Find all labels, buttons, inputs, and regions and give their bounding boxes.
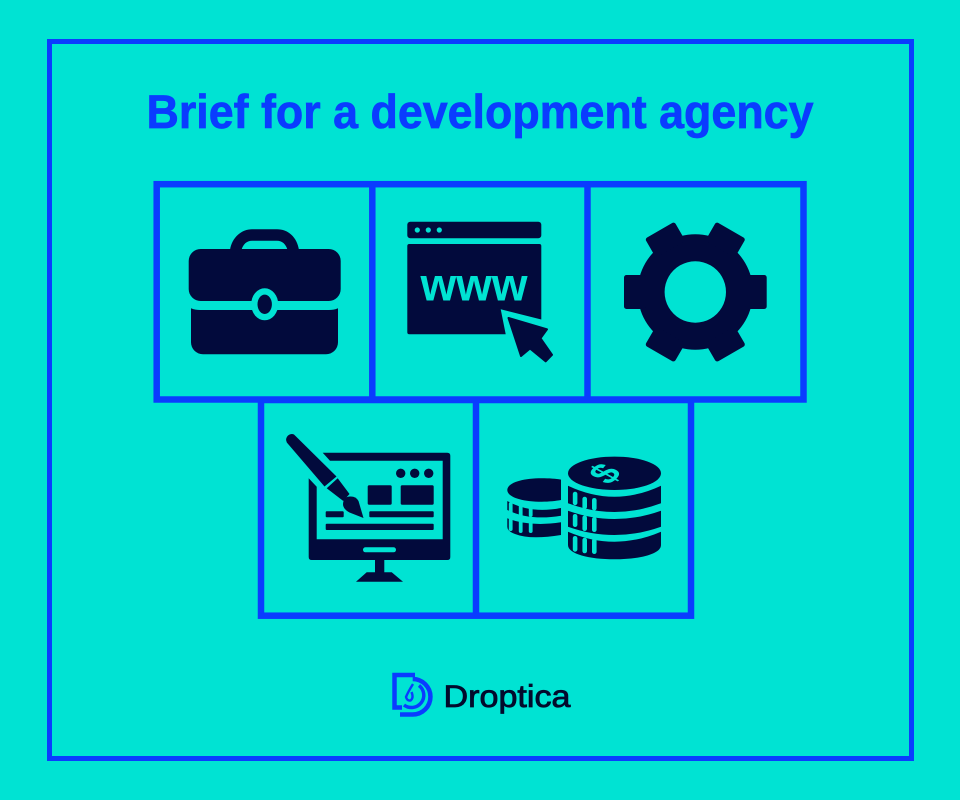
icon: monitor with brush	[286, 434, 450, 582]
logo wordmark: Droptica	[444, 678, 571, 714]
icon: briefcase	[189, 229, 341, 354]
grid of icon cells	[157, 184, 803, 616]
logo: Droptica	[394, 675, 571, 714]
title: Brief for a development agency	[146, 85, 814, 138]
icon: gear	[624, 222, 767, 362]
icon: coin stacks: $	[580, 457, 631, 490]
icon: coin stacks	[507, 457, 661, 559]
icon: browser window with cursor: www	[420, 258, 528, 310]
logo mark	[394, 675, 430, 714]
icon: browser window with cursor	[407, 222, 552, 361]
